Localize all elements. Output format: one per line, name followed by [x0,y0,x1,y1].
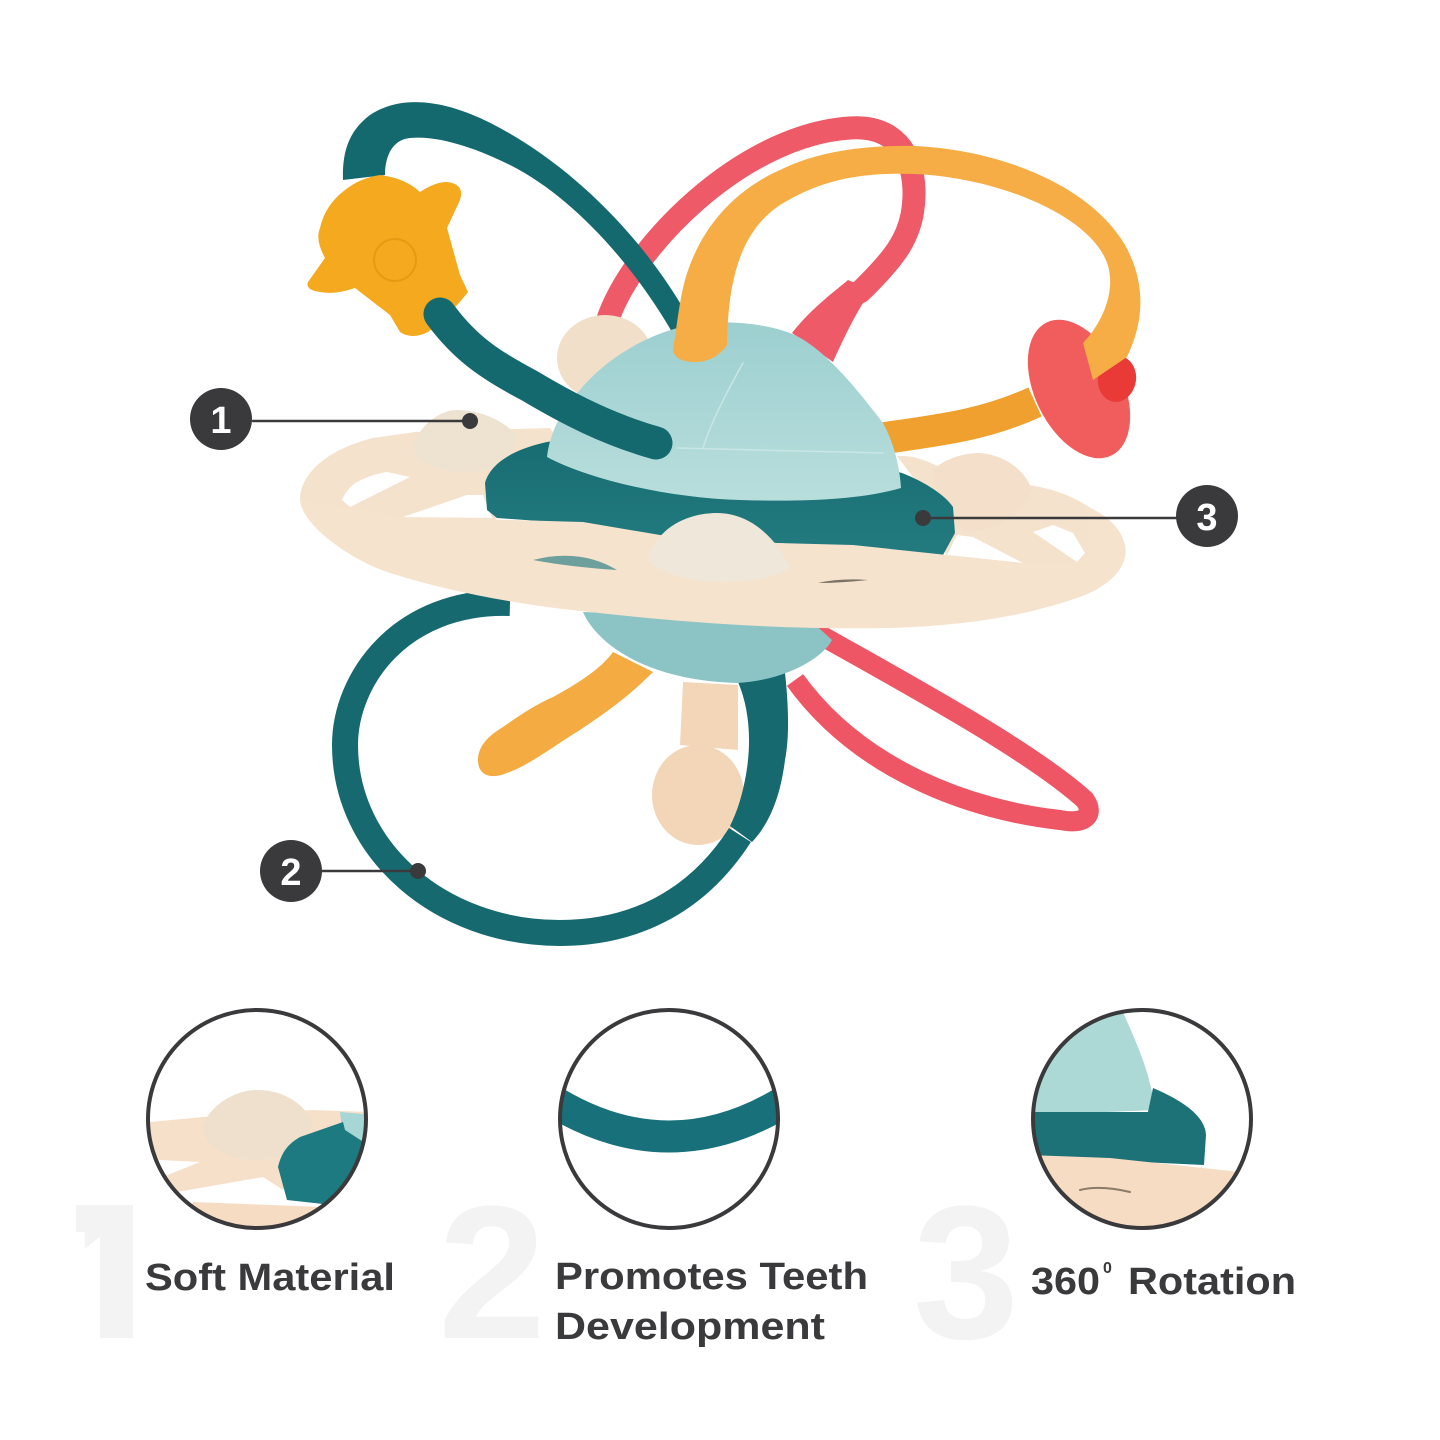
red bead flange [1007,303,1151,475]
lower sphere [583,612,832,683]
numeral 1 [76,1205,133,1338]
inset: rotation [1030,1010,1251,1240]
lower orange stem [478,652,653,776]
teal opening in band [533,556,617,570]
caption 3: 360 [1031,1261,1100,1303]
orange lower segment [885,402,1035,438]
red ring end at dome [792,280,872,362]
callout 2 [260,840,426,902]
orange ring [673,146,1140,380]
teal saucer [485,420,955,555]
front cream bump [648,513,790,582]
caption 3 [1031,1260,1296,1303]
caption 2 [555,1256,868,1348]
teal ring lower segment [440,314,656,443]
cream band front [300,500,1126,628]
numeral 2: 2 [438,1167,546,1379]
lower red loop [795,632,1089,821]
caption 1: Soft Material [145,1257,395,1299]
dome seams [677,363,883,453]
cream stem [680,682,738,750]
caption 2: Promotes Teeth [555,1256,868,1298]
numeral 3: 3 [913,1167,1019,1379]
dome [547,322,901,501]
rocket bead [308,175,468,336]
callout 1 [190,388,478,450]
inset: teeth development [556,1010,782,1228]
inset: soft material [140,1010,375,1240]
dark opening in band [818,579,868,583]
callout 3: 3 [1196,497,1218,539]
back cream left hub with openings [300,428,565,520]
right cream bump [933,453,1032,532]
caption 3: 0 [1103,1260,1112,1277]
cream stem bulb [652,745,744,845]
red bead hole [1094,353,1140,405]
callout 3 [915,485,1238,547]
back cream bump [557,315,653,401]
caption 2: Development [555,1306,825,1348]
red ring back [607,128,914,322]
teal ring top arc [343,102,690,332]
lower teal loop [345,603,740,933]
toy illustration [300,102,1151,933]
caption 3: Rotation [1128,1261,1296,1303]
callout 2: 2 [280,852,302,894]
loop right side [730,673,788,842]
left cream bump [413,410,517,472]
callout 1: 1 [210,400,232,442]
rocket window [374,239,416,281]
numeral 1: 1 [75,1167,155,1379]
back cream right hub with openings [897,456,1125,575]
